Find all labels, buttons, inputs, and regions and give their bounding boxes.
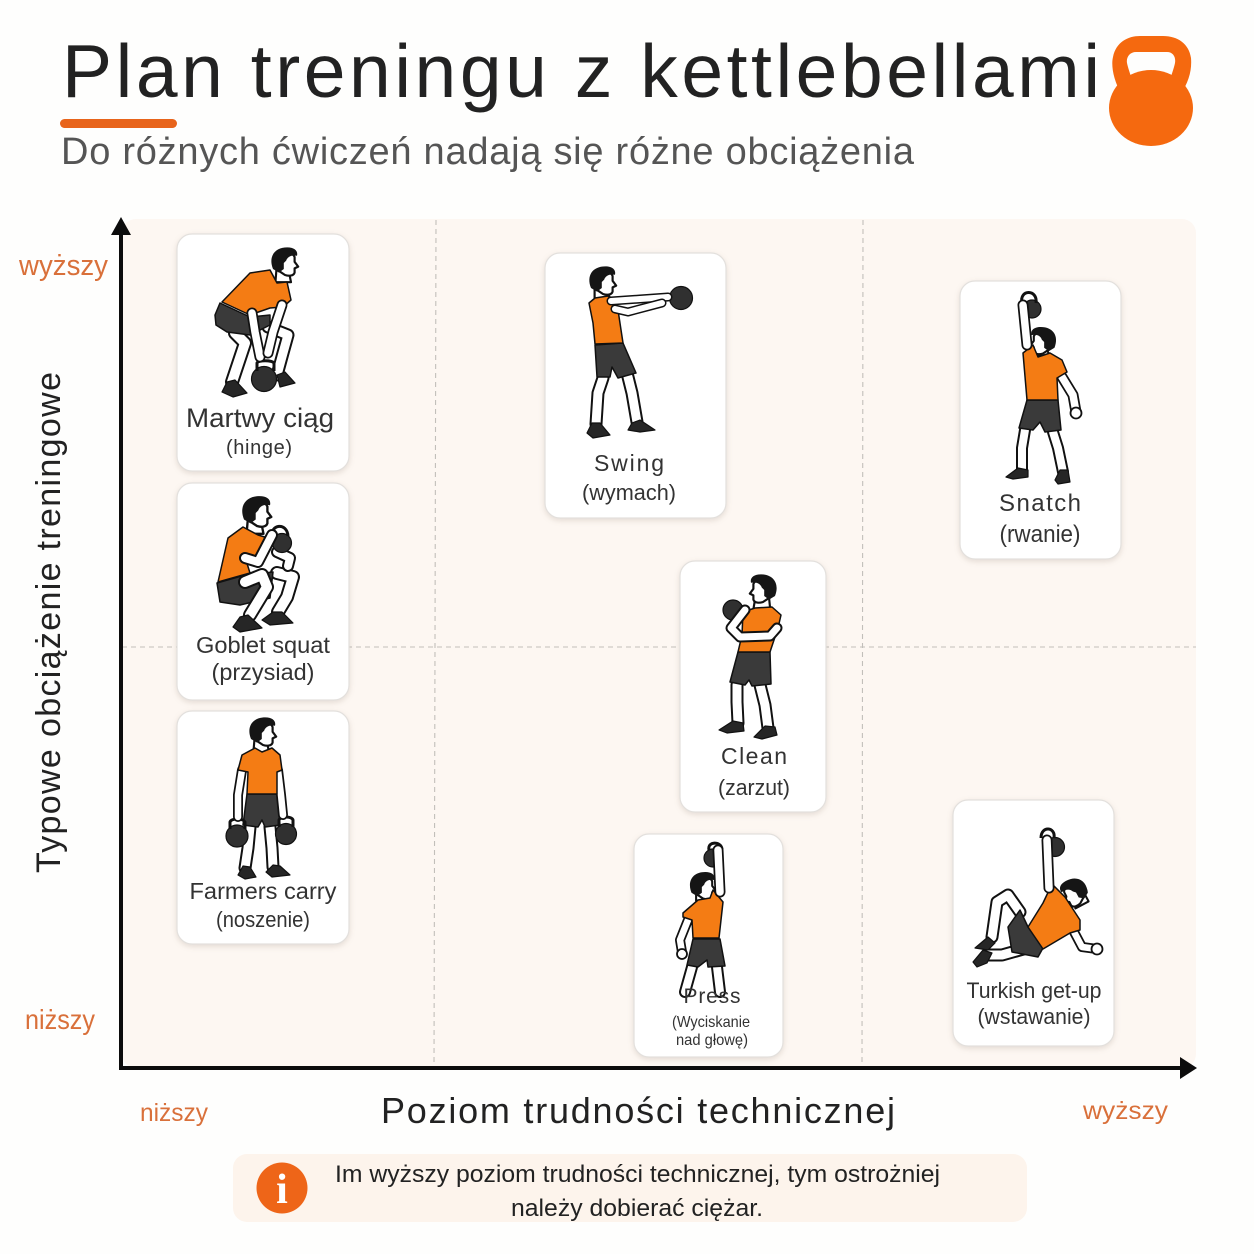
sublabel: wstawanie: (wstawanie) (978, 1004, 1090, 1029)
subtitle: Do różnych ćwiczeń nadają się różne obciążenia (61, 131, 915, 173)
sublabel: wymach: (wymach) (582, 480, 676, 505)
label: swing: Swing (594, 450, 664, 476)
figure: goblet squat (217, 496, 293, 632)
figure: press (677, 843, 725, 992)
callout text line 2: należy dobierać ciężar. (511, 1195, 763, 1222)
figure: swing (587, 266, 692, 438)
card: turkish get-up (953, 800, 1114, 1046)
sublabel: nad głowę: nad głowę) (676, 1032, 748, 1049)
label: clean: Clean (721, 743, 787, 769)
x axis title: Poziom trudności technicznej (381, 1090, 895, 1131)
chart: exercise matrix (111, 217, 1197, 1079)
y axis low label: niższy (25, 1004, 95, 1035)
card: swing (545, 253, 726, 518)
icon: kettlebell (1109, 36, 1193, 146)
label: press: Press (684, 985, 740, 1008)
icon: info: i (276, 1167, 288, 1213)
x axis high label: wyższy (1082, 1097, 1169, 1125)
y axis title: Typowe obciążenie treningowe (30, 372, 68, 873)
sublabel: rwanie: (rwanie) (1000, 521, 1080, 548)
sublabel: przysiad: (przysiad) (212, 659, 314, 685)
x axis low label: niższy (140, 1099, 208, 1127)
figure: deadlift (215, 247, 298, 397)
figure: farmers carry (226, 717, 296, 879)
y axis high label: wyższy (18, 250, 108, 282)
x axis arrow (119, 1057, 1197, 1079)
plot background (122, 219, 1196, 1068)
card: clean (680, 561, 826, 812)
card: farmers carry (177, 711, 349, 944)
card: snatch (960, 281, 1121, 559)
icon: info (256, 1162, 308, 1214)
sublabel: noszenie: (noszenie) (216, 907, 310, 932)
figure: clean (719, 574, 781, 739)
label: goblet squat: Goblet squat (196, 632, 331, 658)
callout text line 1: Im wyższy poziom trudności technicznej, tym ostrożniej (335, 1161, 940, 1188)
label: farmers carry: Farmers carry (190, 878, 337, 904)
label: deadlift: Martwy ciąg (186, 403, 334, 433)
title: Plan treningu z kettlebellami (62, 29, 1100, 113)
card: press (634, 834, 783, 1057)
y axis arrow (111, 217, 131, 1070)
sublabel: hinge: (hinge) (226, 437, 292, 459)
sublabel: wyciskanie: (Wyciskanie (672, 1014, 750, 1031)
title underline (60, 119, 177, 128)
label: snatch: Snatch (999, 490, 1081, 517)
card: deadlift (177, 234, 349, 471)
figure: turkish get-up (973, 829, 1102, 967)
figure: snatch (1006, 292, 1082, 484)
sublabel: zarzut: (zarzut) (718, 775, 790, 800)
callout (233, 1154, 1027, 1222)
card: goblet squat (177, 483, 349, 700)
label: turkish get-up: Turkish get-up (966, 978, 1102, 1003)
